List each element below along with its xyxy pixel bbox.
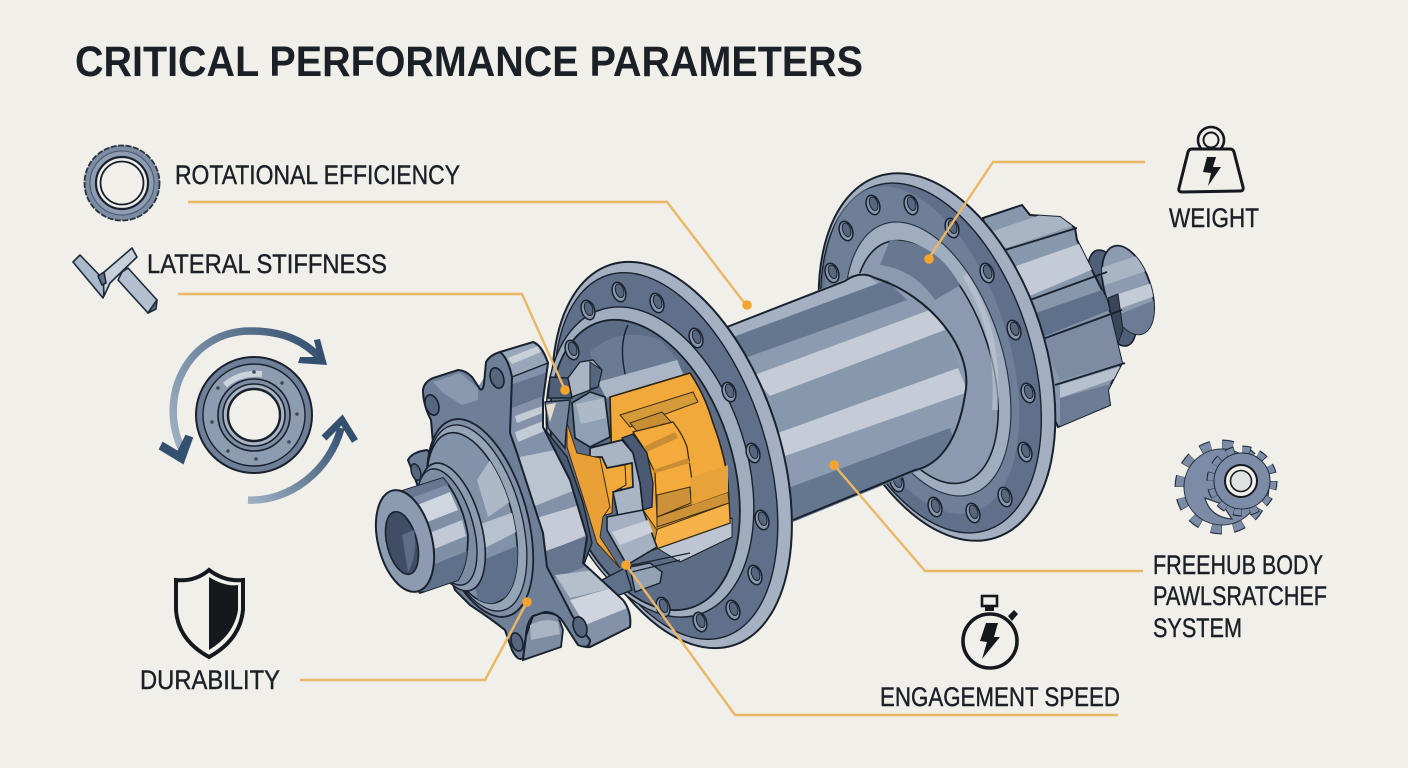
label: lateral stiffness: LATERAL STIFFNESS (147, 249, 387, 279)
label: engagement speed: ENGAGEMENT SPEED (880, 682, 1120, 712)
label: rotational efficiency: ROTATIONAL EFFICIENCY (175, 160, 460, 190)
icon: bearing with rotation arrows (160, 331, 355, 500)
icon: rotational efficiency ring (84, 146, 160, 220)
hub barrel tube (728, 272, 968, 522)
label: freehub body pawls ratchet system (1153, 550, 1327, 643)
left flange (507, 231, 837, 679)
right flange spoke holes (823, 193, 1037, 525)
axle tip right (1088, 244, 1156, 347)
silver pawl and ratchet assembly (548, 360, 690, 598)
seal rings (418, 418, 534, 618)
axle end (374, 477, 469, 594)
bearing ring (196, 357, 312, 473)
hub illustration (374, 172, 1156, 662)
cut section crescent (543, 400, 620, 568)
leader: freehub body (834, 465, 1143, 571)
hub shell carrier body (470, 342, 635, 647)
leader lines (178, 162, 1145, 715)
orange freehub core (610, 373, 730, 550)
icon: freehub gears (1179, 444, 1274, 530)
title: CRITICAL PERFORMANCE PARAMETERS (75, 39, 863, 86)
right cassette splined body (983, 205, 1135, 430)
label: weight: WEIGHT (1169, 203, 1259, 233)
leader end dots (522, 254, 934, 607)
infographic canvas (72, 46, 1326, 716)
icon: weight (1179, 127, 1243, 192)
leader: weight (929, 162, 1145, 258)
leader: engagement speed (626, 565, 1118, 715)
icon: lateral stiffness beams (73, 248, 157, 313)
label: freehub body pawls ratchet system: PAWLSRATCHEF (1153, 581, 1327, 611)
rotor mount lobed face (408, 352, 590, 659)
leader: rotational efficiency (188, 202, 746, 305)
icon: engagement stopwatch (963, 596, 1018, 668)
left flange spoke holes (563, 280, 771, 634)
label: freehub body pawls ratchet system: FREEHUB BODY (1153, 550, 1323, 580)
icon: durability shield (176, 570, 243, 657)
lower lobe side (523, 613, 563, 660)
arrow: lower rotation (248, 420, 355, 500)
label: durability: DURABILITY (140, 665, 280, 695)
arrow: upper rotation (160, 331, 327, 463)
leader: lateral stiffness (178, 294, 565, 390)
right flange (776, 143, 1098, 571)
label: freehub body pawls ratchet system: SYSTEM (1153, 613, 1242, 643)
leader: durability (300, 602, 527, 680)
